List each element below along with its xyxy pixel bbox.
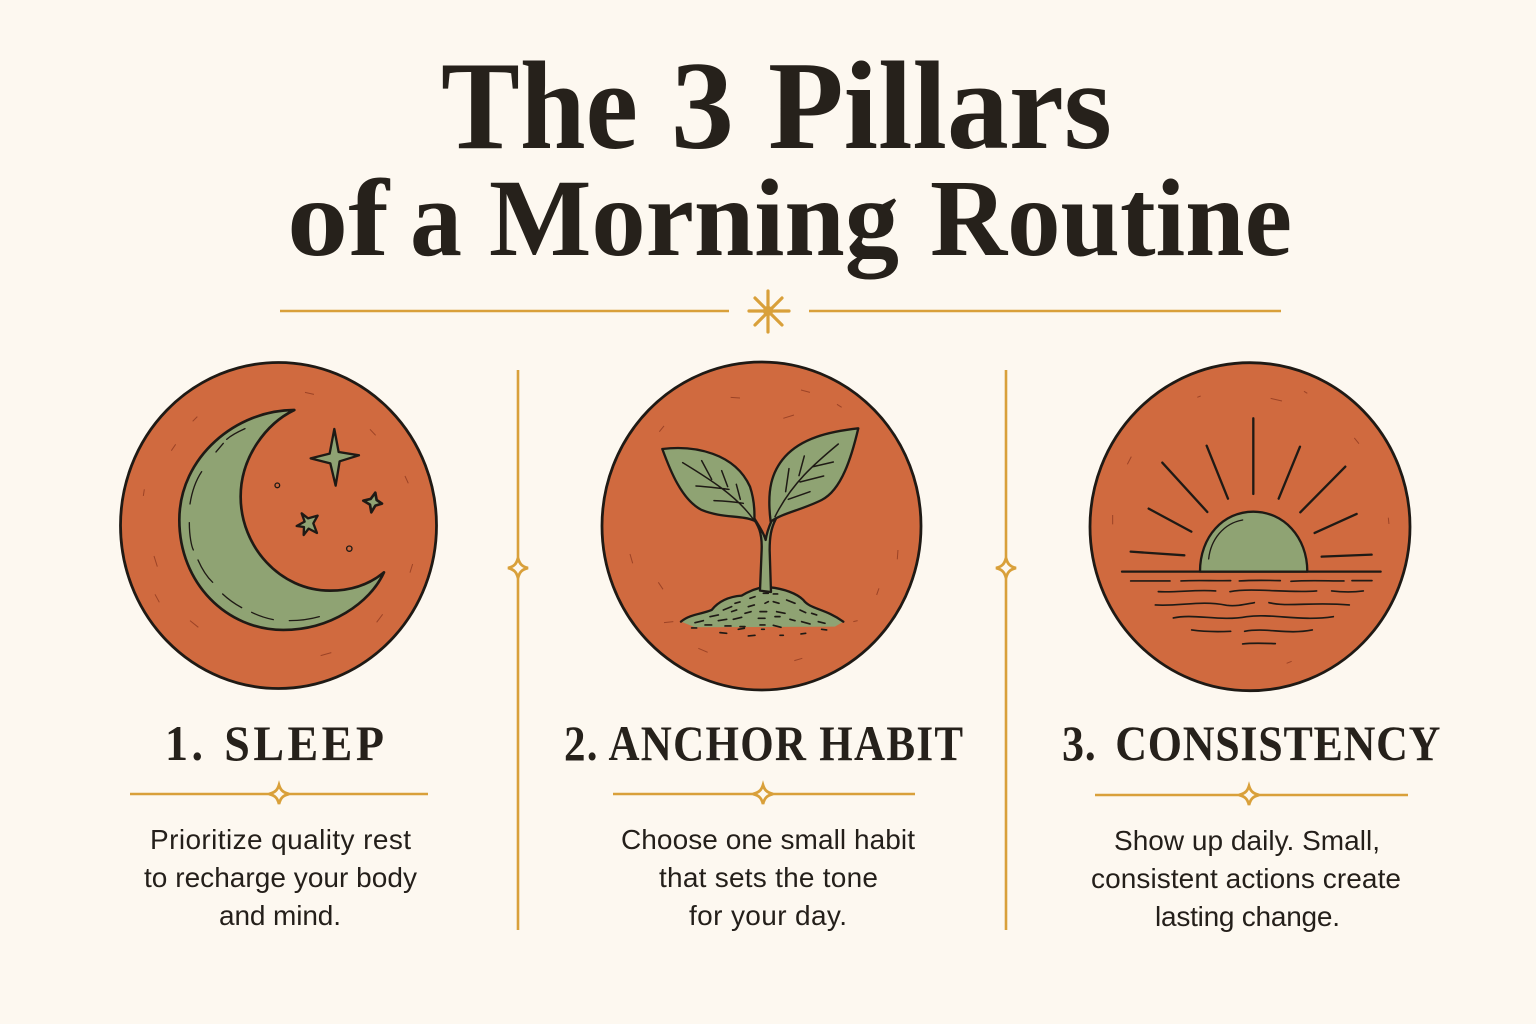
title <box>287 37 1292 279</box>
rule with star <box>130 785 428 804</box>
icon: seedling <box>602 362 921 690</box>
title: The <box>441 37 638 176</box>
rule with star <box>613 785 915 804</box>
title: a <box>410 157 462 279</box>
heading: 1. sleep: 1. SLEEP <box>165 716 384 771</box>
description: consistency: Show up daily. Small, <box>1114 825 1380 856</box>
description: anchor habit <box>621 824 915 931</box>
column divider left <box>508 370 528 930</box>
description: sleep: and mind. <box>219 900 341 931</box>
heading: 2. anchor habit: 2. ANCHOR HABIT <box>564 716 963 772</box>
heading: 3. consistency: 3. CONSISTENCY <box>1062 716 1440 772</box>
description: sleep: to recharge your body <box>144 862 417 893</box>
panel: anchor habit <box>564 362 963 931</box>
title: Routine <box>930 157 1292 279</box>
rule with star <box>1095 786 1408 805</box>
title divider with star <box>280 291 1281 332</box>
title: of <box>287 157 391 279</box>
description: sleep <box>144 824 417 931</box>
description: sleep: Prioritize quality rest <box>150 824 411 855</box>
panel: sleep <box>120 362 436 931</box>
description: consistency: consistent actions create <box>1091 863 1401 894</box>
description: anchor habit: Choose one small habit <box>621 824 915 855</box>
title: Morning <box>489 157 899 279</box>
panel: consistency <box>1062 363 1440 932</box>
column divider right <box>996 370 1016 930</box>
icon: sunrise <box>1090 363 1410 691</box>
icon: moon and stars <box>120 362 436 688</box>
description: consistency: lasting change. <box>1155 901 1340 932</box>
description: consistency <box>1091 825 1401 932</box>
description: anchor habit: that sets the tone <box>659 862 878 893</box>
description: anchor habit: for your day. <box>689 900 847 931</box>
title: 3 <box>671 37 734 176</box>
title: Pillars <box>768 37 1112 176</box>
